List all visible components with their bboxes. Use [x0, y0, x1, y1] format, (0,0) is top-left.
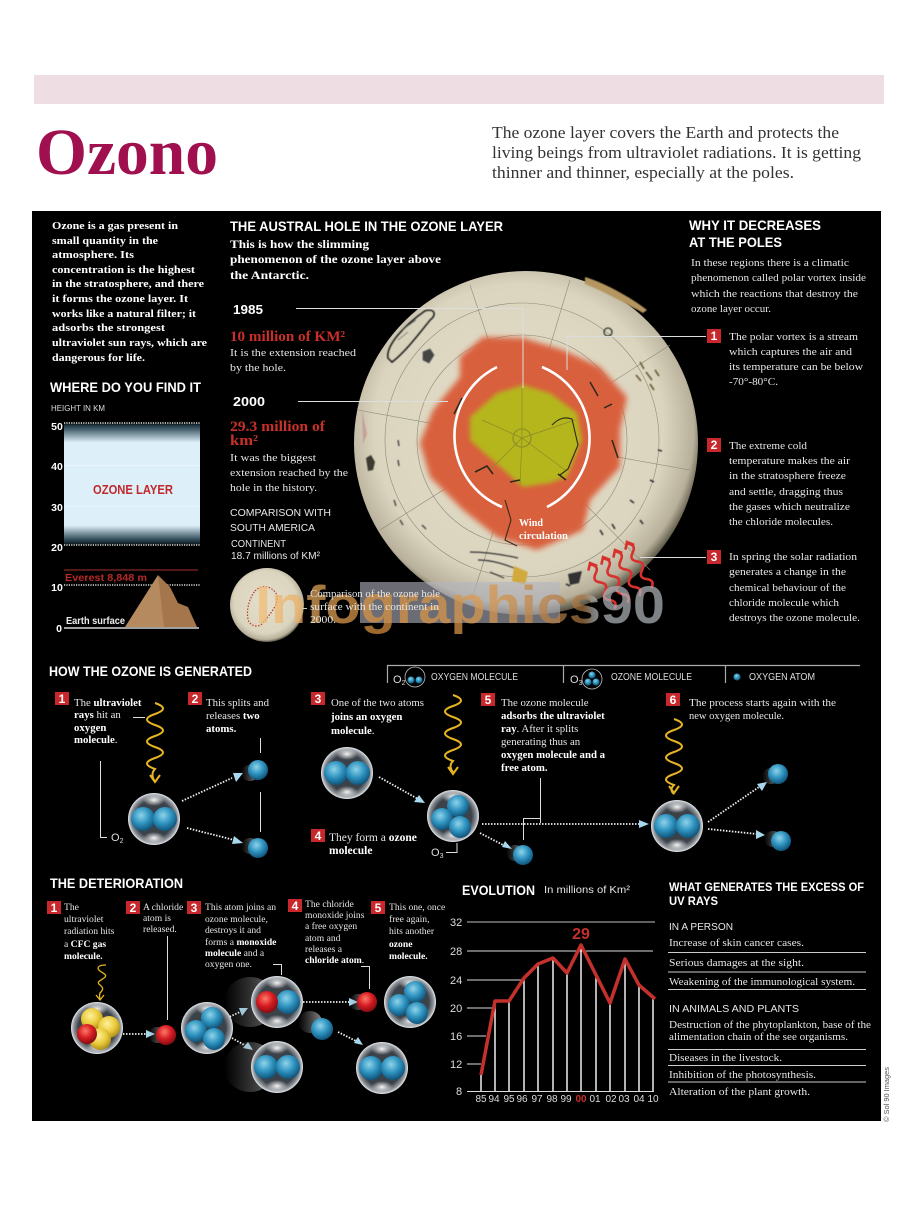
text: regions: In these regions there is a climatic: [691, 257, 849, 269]
step 6 text: [666, 693, 836, 722]
dotted arrows: [123, 998, 363, 1050]
legend: O: [393, 674, 402, 686]
credit: © Sol 90 Images: [883, 1066, 891, 1122]
Antarctica details: [454, 382, 618, 546]
text: ozone definition: ultraviolet sun rays, which are: [52, 337, 207, 349]
deterioration step 5: ozone: [389, 939, 413, 950]
step 1 text: molecule.: [74, 734, 117, 746]
ozone layer band: [64, 423, 200, 545]
step 3: solar radiation: chemical behaviour of the: [729, 582, 846, 594]
height axis labels: 0: [56, 623, 62, 635]
step 5 text: [481, 693, 606, 774]
step 1 text: rays hit an: [74, 709, 121, 721]
intro text: living beings from ultraviolet radiations. It is getting: [492, 143, 862, 162]
year 1985 block: [230, 302, 523, 388]
text: ozone definition: atmosphere. Its: [52, 249, 135, 261]
deterioration step 5: This one, once: [389, 902, 445, 913]
text: regions: [691, 257, 866, 315]
step 5 text: ray. After it splits: [501, 723, 578, 735]
legend: [388, 666, 860, 689]
text: regions: which the reactions that destroy the: [691, 288, 858, 300]
height axis labels: 40: [51, 461, 63, 473]
step 2: extreme cold: in the stratosphere freeze: [729, 470, 846, 482]
legend: 3: [579, 680, 583, 687]
deterioration step 4: chloride atom.: [305, 955, 364, 966]
x axis labels: 04: [633, 1094, 645, 1105]
deterioration step 3: This atom joins an: [205, 902, 276, 913]
height axis labels: 50: [51, 421, 63, 433]
panel: the deterioration: [47, 875, 445, 1094]
panel: where do you find it: [50, 379, 201, 635]
deterioration step 5: molecule.: [389, 951, 428, 962]
heading: what generates the excess: [669, 880, 864, 908]
step 4 text: [311, 829, 417, 857]
label: wind circulation: Wind: [519, 518, 543, 529]
text: ozone definition: works like a natural filter; it: [52, 308, 196, 320]
heading: why it decreases: AT THE POLES: [689, 234, 782, 250]
list: effects on a person: Serious damages at the sight.: [669, 957, 804, 969]
label: ozone layer: OZONE LAYER: [93, 482, 174, 497]
label: Everest: Everest 8,848 m: [65, 572, 147, 584]
step 2: extreme cold: [707, 438, 850, 528]
step 2 text: atoms.: [206, 723, 237, 735]
deterioration step 5: 5: [375, 901, 382, 915]
deterioration step 1: 1: [51, 901, 58, 915]
panel: evolution chart: [450, 882, 659, 1105]
text: ozone definition: adsorbs the strongest: [52, 322, 165, 334]
year 2000 block: hole in the history.: [230, 482, 317, 494]
deterioration step 5: [371, 901, 445, 962]
deterioration step 5: hits another: [389, 926, 435, 937]
rays: [147, 695, 682, 794]
deterioration step 4: a free oxygen: [305, 921, 357, 932]
step 1: polar vortex: The polar vortex is a stream: [729, 331, 859, 343]
heading: the deterioration: THE DETERIORATION: [50, 875, 183, 891]
caption: ozone hole comparison: surface with the continent in: [310, 601, 440, 613]
subheading: in a person: IN A PERSON: [669, 921, 733, 933]
step 3: solar radiation: 3: [711, 550, 718, 564]
list: effects on a person: Increase of skin cancer cases.: [669, 937, 804, 949]
wind circulation arcs: [454, 367, 590, 507]
caption: ozone hole comparison: 2000.: [310, 614, 336, 626]
x axis labels: 00: [575, 1094, 587, 1105]
subheading: slimming phenomenon: the Antarctic.: [230, 268, 309, 282]
step 3 text: joins an oxygen: [330, 711, 402, 723]
watermark: Infographics90: [255, 576, 665, 635]
year 1985 block: by the hole.: [230, 362, 286, 374]
deterioration step 4: 4: [292, 899, 299, 913]
deterioration step 4: releases a: [305, 944, 343, 955]
text: ozone definition: [52, 220, 207, 364]
y axis labels: 8: [456, 1086, 462, 1098]
step 2 text: 2: [192, 692, 199, 706]
step 3: solar radiation: generates a change in the: [729, 566, 846, 578]
deterioration step 3: 3: [191, 901, 198, 915]
heading: austral hole: THE AUSTRAL HOLE IN THE OZONE LAYER: [230, 218, 503, 234]
molecules: [71, 976, 436, 1094]
height axis labels: [51, 421, 63, 635]
label: O3: O: [431, 847, 440, 859]
subheading: slimming phenomenon: [230, 237, 442, 282]
step 2 text: This splits and: [206, 697, 270, 709]
chart unit: In millions of Km²: [544, 884, 631, 896]
step 1 text: The ultraviolet: [74, 697, 142, 709]
year 1985 block: 10 million of KM²: [230, 329, 346, 345]
deterioration step 3: destroys it and: [205, 925, 261, 936]
list: effects on animals and plants: Inhibition of the photosynthesis.: [669, 1069, 816, 1081]
x axis labels: 97: [531, 1094, 543, 1105]
ozone hole red area: [420, 337, 627, 550]
step 5 text: generating thus an: [501, 736, 581, 748]
x axis labels: 98: [546, 1094, 558, 1105]
y axis labels: 28: [450, 946, 462, 958]
leader lines: [100, 718, 540, 852]
peak value: 29: [572, 926, 590, 943]
caption: ozone hole comparison: Comparison of the ozone hole: [310, 588, 440, 600]
step 3 text: [311, 692, 424, 737]
legend: OXYGEN ATOM: [749, 672, 815, 683]
x axis labels: 99: [560, 1094, 572, 1105]
list: effects on animals and plants: [669, 1019, 871, 1098]
step 6 text: The process starts again with the: [689, 697, 836, 709]
data line: [481, 945, 655, 1075]
subheading: animals and plants: IN ANIMALS AND PLANTS: [669, 1003, 799, 1015]
deterioration step 2: released.: [143, 924, 177, 935]
y axis labels: 12: [450, 1059, 462, 1071]
step 1: polar vortex: -70°-80°C.: [729, 376, 778, 388]
step 6 text: new oxygen molecule.: [689, 710, 784, 722]
step 1 text: oxygen: [74, 722, 106, 734]
leader lines: [168, 936, 370, 1020]
step 1: polar vortex: 1: [711, 329, 718, 343]
legend: 2: [402, 680, 406, 687]
x axis labels: 01: [589, 1094, 601, 1105]
text: ozone definition: concentration is the highest: [52, 264, 195, 276]
red heat rays: [586, 540, 656, 611]
text: ozone definition: small quantity in the: [52, 235, 158, 247]
comparison with South America: COMPARISON WITH: [230, 507, 331, 519]
comparison with South America: SOUTH AMERICA: [230, 522, 315, 534]
deterioration step 1: The: [64, 902, 79, 913]
ray on CFC molecule: [96, 965, 106, 1000]
intro text: [492, 123, 862, 182]
deterioration step 3: molecule and a: [205, 948, 265, 959]
deterioration step 2: 2: [130, 901, 137, 915]
step 2: extreme cold: the chloride molecules.: [729, 516, 833, 528]
step 3: solar radiation: destroys the ozone molecule.: [729, 612, 860, 624]
intro text: thinner and thinner, especially at the poles.: [492, 163, 794, 182]
step 1: polar vortex: which captures the air and: [729, 346, 853, 358]
heading: what generates the excess: WHAT GENERATES THE EXCESS OF: [669, 880, 864, 894]
year 2000 block: extension reached by the: [230, 467, 348, 479]
Antarctica yellow area: [470, 385, 582, 487]
heading: what generates the excess: UV RAYS: [669, 894, 718, 908]
panel: excess of UV rays: [668, 880, 871, 1098]
x axis labels: 10: [647, 1094, 659, 1105]
year 2000 block: 2000: [233, 394, 265, 409]
heading: where do you find it: WHERE DO YOU FIND IT: [50, 379, 201, 395]
step 5 text: free atom.: [501, 762, 548, 774]
step 2: extreme cold: 2: [711, 438, 718, 452]
text: ozone definition: dangerous for life.: [52, 352, 145, 364]
heading: how the ozone is generated: HOW THE OZONE IS GENERATED: [49, 663, 252, 679]
label: wind circulation: [519, 518, 568, 542]
height axis labels: 10: [51, 582, 63, 594]
molecules: [128, 747, 791, 865]
text: ozone definition: Ozone is a gas present in: [52, 220, 178, 232]
deterioration step 2: atom is: [143, 913, 171, 924]
text: regions: phenomenon called polar vortex inside: [691, 272, 866, 284]
list: effects on a person: [669, 937, 855, 988]
y axis labels: 16: [450, 1031, 462, 1043]
height axis labels: 30: [51, 502, 63, 514]
step 1 text: [55, 692, 142, 746]
comparison with South America: CONTINENT: [231, 539, 286, 550]
step 5 text: adsorbs the ultraviolet: [501, 710, 605, 722]
x axis labels: [475, 1094, 659, 1105]
step 2: extreme cold: temperature makes the air: [729, 455, 850, 467]
label: O2: 2: [120, 838, 124, 845]
list: effects on animals and plants: Diseases in the livestock.: [669, 1052, 782, 1064]
text: ozone definition: in the stratosphere, and there: [52, 278, 204, 290]
grid and bars: [467, 922, 655, 1092]
step 3: solar radiation: [640, 550, 860, 624]
step 2 text: [188, 692, 270, 735]
globe grid: [358, 280, 690, 605]
step 3 text: molecule.: [331, 725, 374, 737]
x axis labels: 85: [475, 1094, 487, 1105]
y axis labels: [450, 917, 462, 1098]
comparison with South America: [230, 507, 331, 562]
label: wind circulation: circulation: [519, 531, 568, 542]
dotted arrows: [182, 773, 767, 849]
step 2: extreme cold: and settle, dragging thus: [729, 486, 843, 498]
panel: how the ozone is generated: [49, 663, 860, 865]
deterioration step 3: forms a monoxide: [205, 937, 277, 948]
deterioration step 1: molecule.: [64, 951, 103, 962]
step 4 text: molecule: [329, 845, 372, 857]
deterioration step 4: atom and: [305, 933, 341, 944]
year 2000 block: 29.3 million of: [230, 419, 326, 435]
step 5 text: oxygen molecule and a: [501, 749, 606, 761]
caption: ozone hole comparison: [302, 588, 440, 626]
comparison with South America: 18.7 millions of KM²: [231, 551, 321, 562]
y axis labels: 32: [450, 917, 462, 929]
continents on globe: [362, 277, 662, 586]
step 2 text: releases two: [206, 710, 260, 722]
x axis labels: 95: [503, 1094, 515, 1105]
intro text: The ozone layer covers the Earth and protects the: [492, 123, 839, 142]
label: Earth surface: Earth surface: [66, 615, 125, 627]
list: effects on animals and plants: alimentation chain of the see organisms.: [669, 1031, 848, 1043]
step 6 text: 6: [670, 693, 677, 707]
text: regions: ozone layer occur.: [691, 303, 771, 315]
step 1: polar vortex: its temperature can be below: [729, 361, 863, 373]
label: O3: 3: [440, 853, 444, 860]
step 4 text: 4: [315, 829, 322, 843]
deterioration step 3: [187, 901, 277, 970]
step 1 text: 1: [59, 692, 66, 706]
x axis labels: 02: [605, 1094, 617, 1105]
list: effects on animals and plants: Destruction of the phytoplankton, base of the: [669, 1019, 871, 1031]
y axis labels: 20: [450, 1003, 462, 1015]
step 5 text: 5: [485, 693, 492, 707]
step 2: extreme cold: the gases which neutralize: [729, 501, 850, 513]
deterioration step 4: [288, 899, 365, 966]
panel: why it decreases: [567, 217, 866, 624]
step 2: extreme cold: The extreme cold: [729, 440, 808, 452]
step 5 text: The ozone molecule: [501, 697, 589, 709]
subheading: slimming phenomenon: phenomenon of the ozone layer above: [230, 252, 442, 266]
heading: evolution: EVOLUTION: [462, 882, 535, 898]
deterioration step 1: [47, 901, 115, 962]
mountain: Everest: [125, 575, 197, 627]
year 2000 block: It was the biggest: [230, 452, 316, 464]
deterioration step 5: free again,: [389, 914, 429, 925]
deterioration step 3: oxygen one.: [205, 959, 252, 970]
legend: OXYGEN MOLECULE: [431, 672, 518, 683]
deterioration step 1: radiation hits: [64, 926, 115, 937]
label: O2: O: [111, 832, 120, 844]
year 2000 block: [230, 394, 448, 494]
globe with ozone hole: [354, 271, 698, 615]
height axis labels: 20: [51, 542, 63, 554]
deterioration step 4: monoxide joins: [305, 910, 365, 921]
title: Ozono: [36, 116, 218, 189]
x axis labels: 94: [488, 1094, 500, 1105]
step 4 text: They form a ozone: [329, 832, 417, 844]
deterioration step 2: A chloride: [143, 902, 183, 913]
step 3 text: 3: [315, 692, 322, 706]
axis title: HEIGHT IN KM: [51, 404, 105, 413]
text: ozone definition: it forms the ozone layer. It: [52, 293, 188, 305]
year 1985 block: It is the extension reached: [230, 347, 357, 359]
deterioration step 3: ozone molecule,: [205, 914, 268, 925]
deterioration step 4: The chloride: [305, 899, 354, 910]
deterioration step 1: ultraviolet: [64, 914, 104, 925]
small globe comparison: [230, 568, 304, 642]
deterioration step 1: a CFC gas: [64, 939, 106, 950]
x axis labels: 03: [618, 1094, 630, 1105]
subheading: slimming phenomenon: This is how the slimming: [230, 237, 369, 251]
year 1985 block: 1985: [233, 302, 263, 317]
deterioration step 2: [126, 901, 183, 935]
step 3 text: One of the two atoms: [331, 697, 424, 709]
step 3: solar radiation: chloride molecule which: [729, 597, 840, 609]
pink header band: [34, 75, 884, 104]
year 2000 block: km²: [230, 433, 259, 449]
heading: why it decreases: WHY IT DECREASES: [689, 217, 821, 233]
black main panel: [32, 211, 881, 1121]
step 1: polar vortex: [567, 329, 863, 388]
x axis labels: 96: [516, 1094, 528, 1105]
step 3: solar radiation: In spring the solar radiation: [729, 551, 858, 563]
legend: O: [570, 674, 579, 686]
legend: OZONE MOLECULE: [611, 672, 692, 683]
heading: why it decreases: [689, 217, 821, 250]
list: effects on animals and plants: Alteration of the plant growth.: [669, 1086, 810, 1098]
y axis labels: 24: [450, 975, 462, 987]
list: effects on a person: Weakening of the immunological system.: [669, 976, 855, 988]
